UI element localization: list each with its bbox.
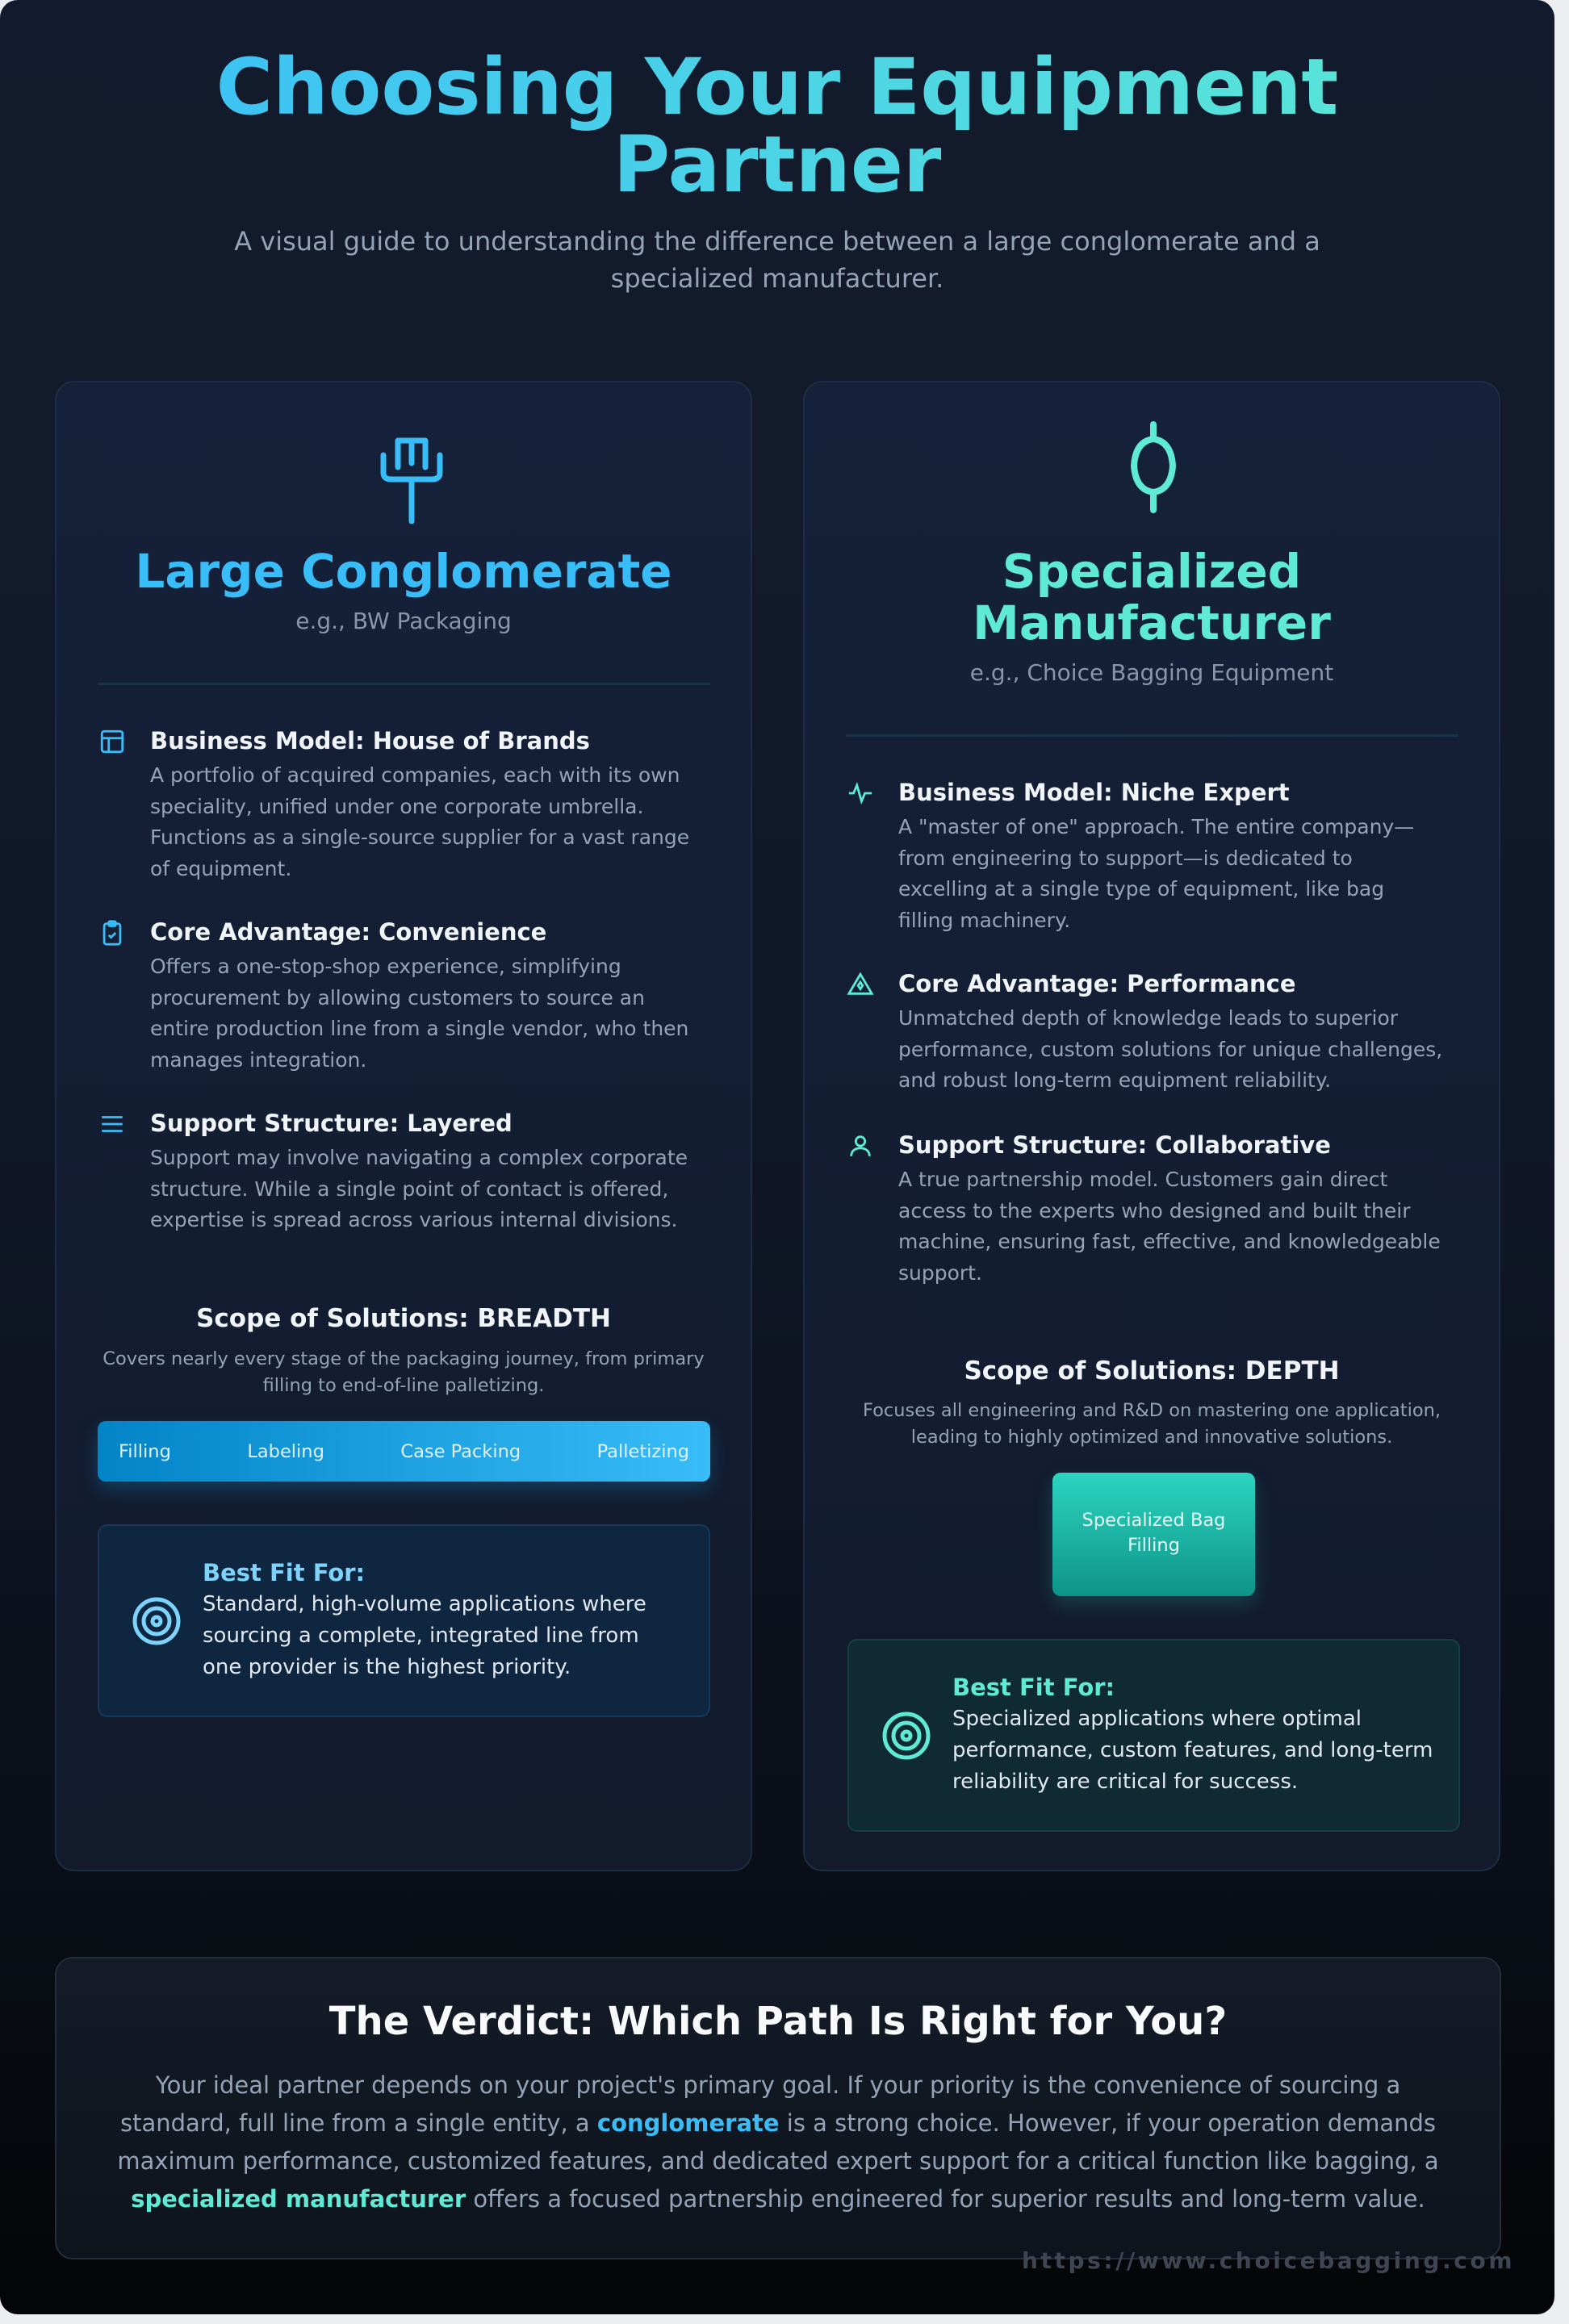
item: business model (100, 727, 689, 880)
item: core advantage: entire production line from a single vendor, who then (150, 1017, 688, 1040)
button: specialized bag filling: Specialized Bag (1082, 1510, 1225, 1531)
item: core advantage: and robust long-term equipment reliability. (898, 1068, 1331, 1092)
item: business model: Functions as a single-source supplier for a vast range (150, 826, 689, 849)
item: support structure: support. (898, 1260, 982, 1285)
item: business model: excelling at a single type of equipment, like bag (898, 877, 1384, 901)
icon: layout (100, 729, 124, 754)
item: core advantage (103, 918, 688, 1072)
title: Partner (613, 119, 941, 210)
icon: target (883, 1712, 930, 1759)
bar: stages: Case Packing (400, 1441, 521, 1462)
example: e.g., Choice Bagging Equipment (970, 659, 1333, 686)
bar: stages: Filling (119, 1441, 171, 1462)
best fit box (98, 1524, 710, 1717)
item: core advantage: performance, custom solutions for unique challenges, (898, 1038, 1442, 1060)
heading (973, 544, 1331, 650)
panel: verdict (55, 1957, 1501, 2259)
verdict text: standard, full line from a single entity, a conglomerate is a strong choice. However, if your operation demands (120, 2109, 1436, 2137)
item: core advantage (847, 970, 1442, 1092)
icon: target (132, 1598, 181, 1645)
item: business model: Business Model: Niche Expert (898, 779, 1290, 806)
icon: pulse (849, 782, 872, 805)
item: business model: speciality, unified under one corporate umbrella. (150, 794, 643, 818)
icon: clipboard (103, 920, 121, 946)
item: business model: Business Model: House of Brands (150, 727, 590, 754)
example: e.g., BW Packaging (295, 608, 512, 634)
subtitle: specialized manufacturer. (611, 263, 943, 294)
icon: trident (381, 437, 442, 524)
button: specialized bag filling (1052, 1473, 1255, 1596)
item: support structure: Support may involve navigating a complex corporate (150, 1146, 688, 1169)
best fit box: performance, custom features, and long-term (952, 1738, 1433, 1762)
item: support structure: structure. While a single point of contact is offered, (150, 1177, 668, 1201)
title: Choosing Your Equipment (216, 42, 1338, 132)
scope description: Covers nearly every stage of the packaging journey, from primary (103, 1348, 705, 1369)
item: core advantage: Unmatched depth of knowledge leads to superior (898, 1006, 1398, 1030)
bar: stages: Palletizing (597, 1441, 689, 1462)
item: support structure: Support Structure: Collaborative (898, 1131, 1331, 1159)
item: core advantage: Core Advantage: Performance (898, 970, 1296, 997)
heading: Specialized (1002, 544, 1301, 599)
scope description (863, 1400, 1441, 1448)
item: business model: from engineering to support—is dedicated to (898, 846, 1353, 870)
item: support structure: access to the experts who designed and built their (898, 1199, 1411, 1222)
item: business model (849, 779, 1414, 931)
scope description: filling to end-of-line palletizing. (263, 1375, 544, 1396)
item: support structure: machine, ensuring fast, effective, and knowledgeable (898, 1230, 1441, 1253)
scope description: Focuses all engineering and R&D on mastering one application, (863, 1400, 1441, 1421)
item: core advantage: procurement by allowing customers to source an (150, 986, 645, 1009)
item: business model: filling machinery. (898, 909, 1070, 931)
verdict text: specialized manufacturer offers a focused partnership engineered for superior results and long-term value. (131, 2185, 1425, 2213)
item: core advantage: Core Advantage: Convenience (150, 918, 546, 946)
verdict text (117, 2071, 1439, 2213)
heading: Manufacturer (973, 596, 1331, 650)
best fit box: sourcing a complete, integrated line from (203, 1624, 639, 1648)
bar: stages: Labeling (247, 1441, 324, 1462)
item: support structure: Support Structure: Layered (150, 1110, 513, 1137)
subtitle (234, 226, 1320, 294)
best fit box: reliability are critical for success. (952, 1770, 1298, 1794)
subtitle: A visual guide to understanding the difference between a large conglomerate and a (234, 226, 1320, 257)
item: support structure (850, 1131, 1441, 1285)
verdict heading: The Verdict: Which Path Is Right for You? (329, 1999, 1227, 2044)
best fit box: Standard, high-volume applications where (203, 1592, 646, 1616)
item: core advantage: Offers a one-stop-shop experience, simplifying (150, 955, 621, 978)
best fit box: Best Fit For: (203, 1559, 365, 1586)
item: core advantage: manages integration. (150, 1047, 366, 1072)
item: support structure (102, 1110, 688, 1231)
verdict text: maximum performance, customized features, and dedicated expert support for a critical function like bagging, a (117, 2147, 1439, 2175)
scope heading: Scope of Solutions: BREADTH (196, 1304, 611, 1333)
best fit box: one provider is the highest priority. (203, 1655, 571, 1679)
scope description (103, 1348, 705, 1396)
panel: large conglomerate (55, 381, 752, 1871)
best fit box: Specialized applications where optimal (952, 1707, 1362, 1731)
button: specialized bag filling: Filling (1128, 1535, 1180, 1556)
title (0, 48, 1554, 203)
item: business model: of equipment. (150, 857, 291, 880)
url footer: https://www.choicebagging.com (1022, 2247, 1515, 2274)
icon: user (850, 1135, 871, 1156)
item: support structure: expertise is spread across various internal divisions. (150, 1208, 677, 1231)
scope description: leading to highly optimized and innovative solutions. (911, 1427, 1392, 1448)
best fit box: Best Fit For: (952, 1674, 1115, 1701)
item: business model: A portfolio of acquired companies, each with its own (150, 763, 680, 787)
panel: specialized manufacturer (803, 381, 1500, 1871)
icon: menu lines (102, 1116, 123, 1132)
icon: triangle gem (847, 972, 874, 995)
bar: stages (98, 1421, 710, 1482)
item: business model: A "master of one" approach. The entire company— (898, 815, 1414, 838)
verdict text: Your ideal partner depends on your project's primary goal. If your priority is the convenience of sourcing a (156, 2071, 1400, 2099)
scope heading: Scope of Solutions: DEPTH (964, 1356, 1340, 1386)
best fit box (847, 1639, 1460, 1832)
item: support structure: A true partnership model. Customers gain direct (898, 1168, 1387, 1191)
heading: Large Conglomerate (135, 544, 672, 599)
icon: circle on line (1131, 421, 1176, 513)
